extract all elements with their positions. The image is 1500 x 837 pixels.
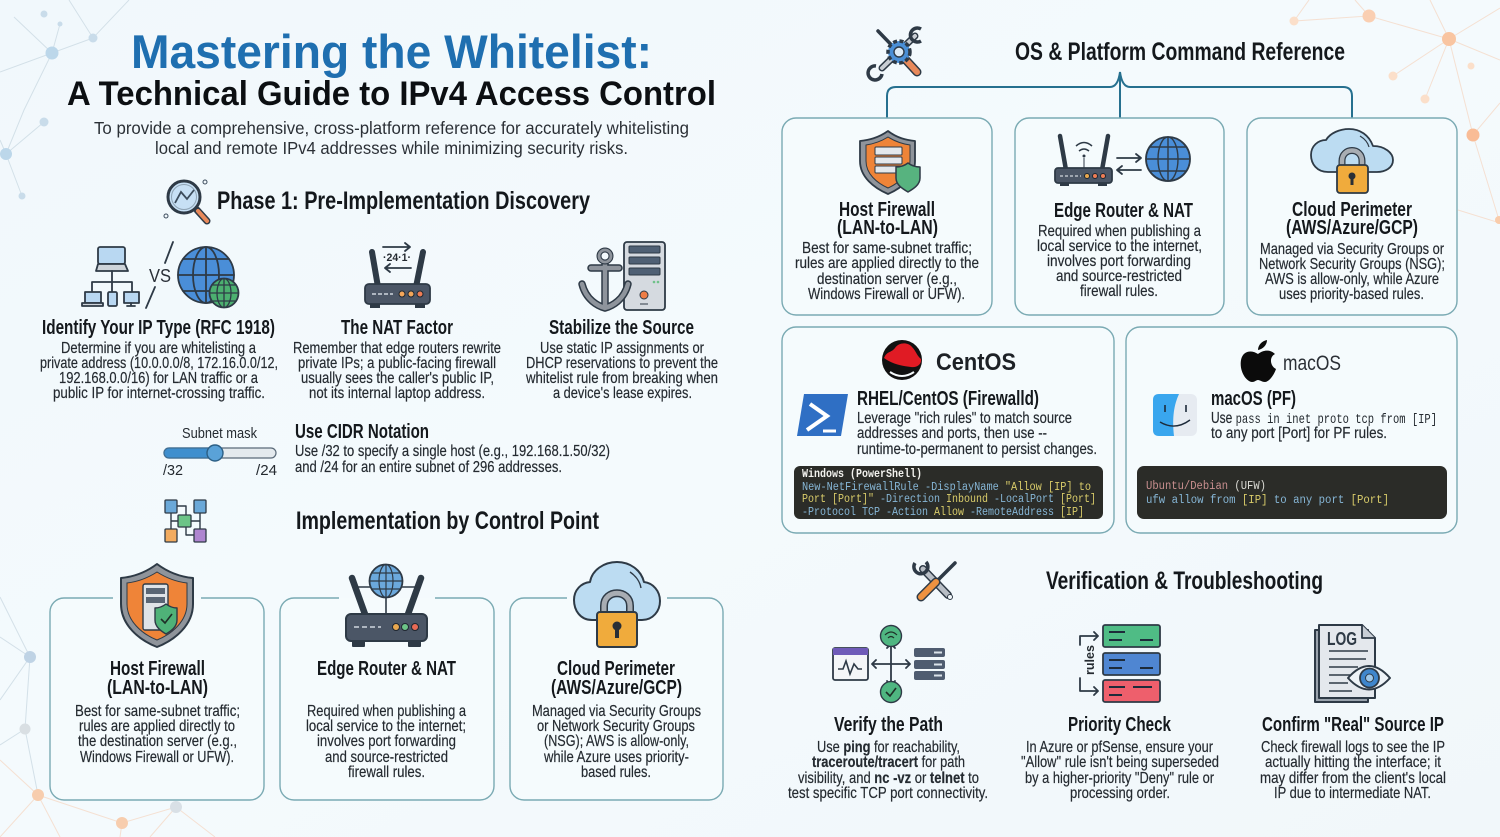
heading [837, 199, 938, 239]
body text: Leverage "rich rules" to match source [857, 410, 1072, 427]
icon: crossed wrench and screwdriver [914, 562, 955, 600]
body text [532, 703, 701, 781]
body text: IP due to intermediate NAT. [1274, 785, 1431, 802]
heading: OS and platform command reference: OS & Platform Command Reference [1015, 38, 1345, 66]
text: identify your IP type: private address (10.0.0.0/8, 172.16.0.0/12, [40, 355, 278, 372]
icon: shield with server [121, 564, 193, 647]
body text: or Network Security Groups [537, 718, 695, 735]
icon: private vs public IP: VS [149, 266, 171, 286]
text: use CIDR notation [295, 421, 610, 476]
slider: subnet mask [163, 425, 277, 479]
text: identify your IP type: public IP for internet-crossing traffic. [53, 385, 265, 402]
body text: (NSG); AWS is allow-only, [544, 733, 689, 750]
logo: CentOS red hat [882, 340, 1016, 380]
body text: visibility, and nc -vz or telnet to [798, 770, 979, 787]
body text: may differ from the client's local [1260, 770, 1446, 787]
body text [1037, 223, 1202, 300]
subtitle [94, 118, 689, 158]
body text: to any port [Port] for PF rules. [1211, 425, 1387, 442]
column: confirm real source IP [1260, 625, 1446, 802]
heading: (AWS/Azure/GCP) [1286, 217, 1418, 239]
icon: flowchart [165, 500, 206, 542]
heading: Host Firewall [110, 658, 205, 680]
body text [306, 703, 466, 781]
body text: the destination server (e.g., [78, 733, 237, 750]
icon: Finder [1153, 394, 1197, 436]
body text [1021, 739, 1219, 802]
panel: host firewall (upper) [782, 118, 992, 315]
icon: private vs public IP [82, 242, 238, 308]
body text: actually hitting the interface; it [1265, 754, 1441, 771]
text: the NAT factor: not its internal laptop address. [309, 385, 485, 402]
text: stabilize the source: Stabilize the Source [549, 317, 694, 339]
body text: Windows Firewall or UFW). [80, 749, 234, 766]
code block: Windows PowerShell [794, 466, 1103, 519]
body text: rules are applied directly to [79, 718, 235, 735]
icon: router with globe [346, 564, 427, 647]
icon: cloud with padlock [1311, 129, 1393, 193]
body text: Required when publishing a [307, 703, 466, 720]
icon: NAT router [365, 243, 430, 308]
body text: destination server (e.g., [817, 271, 957, 288]
connector tree [887, 72, 1352, 118]
text: stabilize the source: whitelist rule from breaking when [525, 370, 718, 387]
body text: addresses and ports, then use -- [857, 425, 1047, 442]
slider: subnet mask: Subnet mask [182, 425, 257, 442]
panel: edge router (upper) [1015, 118, 1224, 315]
text: identify your IP type: 192.168.0.0/16) for LAN traffic or a [59, 370, 258, 387]
heading: (AWS/Azure/GCP) [551, 677, 682, 699]
text: the NAT factor: usually sees the caller's public IP, [301, 370, 494, 387]
body text: local service to the internet, [1037, 238, 1202, 255]
icon: rule priority stack [1080, 625, 1160, 702]
text: stabilize the source: Use static IP assignments or [540, 340, 705, 357]
body text: by a higher-priority "Deny" rule or [1025, 770, 1215, 787]
icon: anchor and server [582, 242, 665, 310]
code block: Ubuntu/Debian UFW: ufw allow from [IP] to any port [Port] [1146, 494, 1389, 507]
body text: based rules. [581, 764, 651, 781]
panel: edge router (lower) [280, 564, 494, 800]
heading [107, 658, 208, 699]
panel: RHEL / CentOS [782, 327, 1114, 533]
logo: Apple and macOS [1241, 340, 1341, 382]
heading: phase 1: Phase 1: Pre-Implementation Discovery [217, 187, 590, 215]
heading [1286, 199, 1418, 239]
code block: Windows PowerShell: New-NetFirewallRule -DisplayName "Allow [IP] to [802, 481, 1091, 494]
heading: verification and troubleshooting: Verification & Troubleshooting [1046, 567, 1323, 595]
decorative network: bottom left [0, 597, 215, 837]
title [67, 25, 716, 113]
body text [857, 410, 1097, 458]
body text: Best for same-subnet traffic; [802, 240, 972, 257]
decorative network: top left [0, 0, 129, 200]
code block: Windows PowerShell: -Protocol TCP -Action Allow -RemoteAddress [IP] [802, 506, 1084, 519]
body text: Use ping for reachability, [817, 739, 960, 756]
heading: Edge Router & NAT [1054, 200, 1193, 222]
title line 1: Mastering the Whitelist: [131, 25, 652, 78]
body text: Managed via Security Groups [532, 703, 701, 720]
panel: host firewall (lower) [50, 564, 264, 800]
body text: rules are applied directly to the [795, 255, 979, 272]
title line 2: A Technical Guide to IPv4 Access Control [67, 75, 716, 113]
body text: Windows Firewall or UFW). [808, 286, 965, 303]
body text [795, 240, 979, 303]
logo: CentOS red hat: CentOS [936, 349, 1016, 376]
text: stabilize the source: DHCP reservations to prevent the [526, 355, 718, 372]
logo: Apple and macOS: macOS [1283, 352, 1341, 375]
icon: magnifier [164, 180, 207, 221]
icon: cloud with padlock [574, 562, 660, 647]
heading: implementation by control point: Implementation by Control Point [296, 507, 600, 535]
text: stabilize the source: a device's lease expires. [553, 385, 692, 402]
body text: traceroute/tracert for path [812, 754, 965, 771]
subtitle: To provide a comprehensive, cross-platform reference for accurately whitelisting [94, 118, 689, 138]
body text: firewall rules. [1080, 283, 1158, 300]
body text: and source-restricted [325, 749, 448, 766]
heading: Priority Check [1068, 714, 1172, 736]
text: identify your IP type: Determine if you are whitelisting a [61, 340, 256, 357]
icon: log document with eye [1315, 625, 1390, 702]
body text [788, 739, 988, 802]
icon: rule priority stack: rules [1082, 645, 1097, 675]
body text: runtime-to-permanent to persist changes. [857, 441, 1097, 458]
body text: "Allow" rule isn't being superseded [1021, 754, 1219, 771]
icon: router, arrows and globe [1055, 136, 1190, 186]
heading: (LAN-to-LAN) [837, 217, 938, 239]
body text: processing order. [1070, 785, 1170, 802]
body text: test specific TCP port connectivity. [788, 785, 988, 802]
body text: AWS is allow-only, while Azure [1265, 271, 1439, 288]
icon: NAT router: ·24·1· [383, 252, 411, 264]
text: the NAT factor: Remember that edge routers rewrite [293, 340, 501, 357]
body text: involves port forwarding [1047, 253, 1191, 270]
body text: Required when publishing a [1038, 223, 1201, 240]
text: use CIDR notation: Use CIDR Notation [295, 421, 429, 443]
heading: Edge Router & NAT [317, 658, 456, 680]
subtitle: local and remote IPv4 addresses while minimizing security risks. [155, 138, 628, 158]
body text: Managed via Security Groups or [1260, 241, 1445, 258]
icon: wrench, screwdriver and gear [868, 28, 921, 80]
heading: (LAN-to-LAN) [107, 677, 208, 699]
heading [551, 658, 682, 699]
text: identify your IP type [40, 317, 278, 402]
icon: connectivity diagram [833, 626, 945, 702]
heading: RHEL/CentOS (Firewalld) [857, 388, 1039, 410]
body text: and source-restricted [1056, 268, 1182, 285]
code block: Windows PowerShell: Windows (PowerShell) [802, 468, 922, 481]
panel: cloud perimeter (lower) [510, 562, 723, 800]
panel: cloud perimeter (upper) [1247, 118, 1457, 315]
code block: Ubuntu/Debian UFW [1137, 466, 1447, 519]
body text [75, 703, 240, 766]
text: stabilize the source [525, 317, 718, 402]
heading: Cloud Perimeter [1292, 199, 1412, 221]
column: verify the path [788, 626, 988, 802]
body text [1260, 739, 1446, 802]
heading: Confirm "Real" Source IP [1262, 714, 1444, 736]
heading: Verify the Path [834, 714, 943, 736]
text: the NAT factor [293, 317, 501, 402]
text: identify your IP type: Identify Your IP Type (RFC 1918) [42, 317, 275, 339]
body text: Check firewall logs to see the IP [1261, 739, 1445, 756]
body text: uses priority-based rules. [1279, 286, 1424, 303]
body text: In Azure or pfSense, ensure your [1026, 739, 1214, 756]
column: priority check [1021, 625, 1219, 802]
decorative network: top right [1290, 0, 1500, 224]
heading: macOS (PF) [1211, 388, 1296, 410]
icon: shield with rack [860, 131, 920, 194]
heading: Host Firewall [839, 199, 935, 221]
text: use CIDR notation: and /24 for an entire subnet of 296 addresses. [295, 459, 562, 476]
body text: Network Security Groups (NSG); [1259, 256, 1445, 273]
body text [1211, 410, 1437, 442]
body text: while Azure uses priority- [543, 749, 689, 766]
code block: Ubuntu/Debian UFW: Ubuntu/Debian (UFW) [1146, 480, 1266, 493]
heading: Cloud Perimeter [557, 658, 675, 680]
body text: local service to the internet; [306, 718, 466, 735]
slider: subnet mask: /32 [163, 462, 183, 479]
text: the NAT factor: private IPs; a public-facing firewall [298, 355, 496, 372]
code block: Windows PowerShell: Port [Port]" -Direction Inbound -LocalPort [Port] [802, 493, 1096, 506]
icon: log document with eye: LOG [1327, 629, 1357, 649]
text: the NAT factor: The NAT Factor [341, 317, 453, 339]
body text: involves port forwarding [317, 733, 456, 750]
body text [1259, 241, 1445, 303]
text: use CIDR notation: Use /32 to specify a single host (e.g., 192.168.1.50/32) [295, 443, 610, 460]
body text: firewall rules. [348, 764, 425, 781]
slider: subnet mask: /24 [256, 462, 277, 479]
body text: Best for same-subnet traffic; [75, 703, 240, 720]
body text: Use pass in inet proto tcp from [IP] [1211, 410, 1437, 428]
panel: macOS [1126, 327, 1457, 533]
icon: PowerShell [797, 394, 848, 436]
